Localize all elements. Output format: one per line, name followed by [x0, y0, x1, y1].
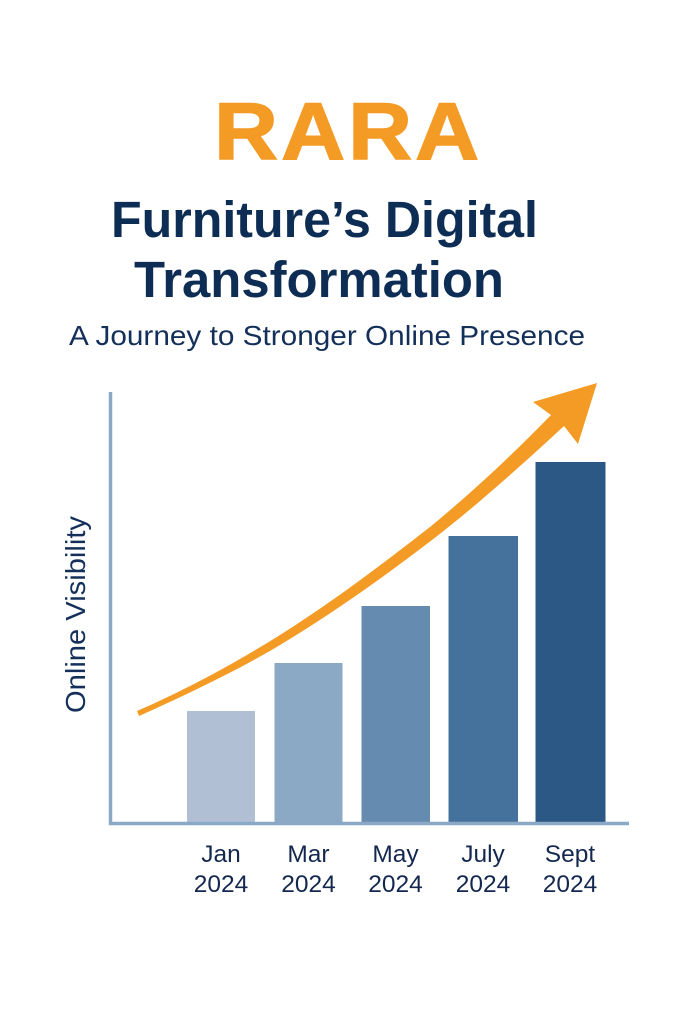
label: July 2024	[456, 841, 510, 898]
label: May 2024	[368, 841, 423, 898]
label: Mar 2024: 2024	[281, 871, 336, 898]
label: July 2024: 2024	[456, 871, 510, 898]
bar: Mar 2024	[274, 663, 342, 823]
heading: Furniture's Digital Transformation	[111, 191, 538, 308]
y axis label: Online Visibility	[60, 516, 91, 713]
label: Sept 2024: 2024	[543, 871, 597, 898]
axes	[110, 392, 629, 824]
label: Mar 2024: Mar	[287, 841, 330, 868]
label: Mar 2024	[281, 841, 336, 898]
label: Jan 2024	[194, 841, 248, 898]
label: Jan 2024: Jan	[201, 841, 241, 868]
x axis labels	[194, 841, 597, 898]
heading: Furniture's Digital Transformation: Transformation	[134, 251, 504, 308]
subtitle: A Journey to Stronger Online Presence	[69, 320, 585, 351]
bar: Sept 2024	[536, 462, 606, 823]
chart: online visibility bar chart	[60, 383, 629, 898]
label: May 2024: 2024	[368, 871, 423, 898]
heading: Furniture's Digital Transformation: Furniture’s Digital	[111, 191, 538, 248]
label: July 2024: July	[461, 841, 506, 868]
label: Sept 2024: Sept	[545, 841, 595, 868]
title: RARA logo: RARA	[214, 85, 479, 176]
label: Sept 2024	[543, 841, 597, 898]
arrow: upward growth trend	[137, 383, 597, 716]
label: Jan 2024: 2024	[194, 871, 248, 898]
label: May 2024: May	[372, 841, 419, 868]
bar: May 2024	[362, 606, 430, 823]
bar: July 2024	[448, 536, 518, 823]
bar: Jan 2024	[187, 711, 255, 823]
